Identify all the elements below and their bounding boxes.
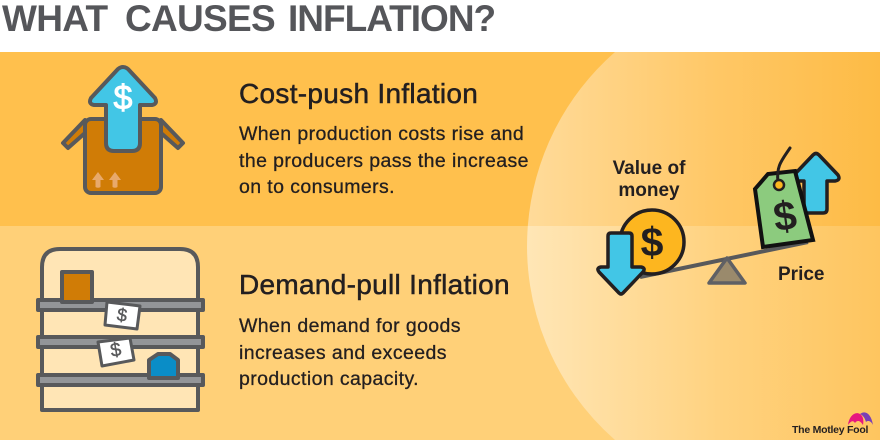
label: price: Price <box>778 264 824 285</box>
logo text: The Motley Fool <box>792 424 868 436</box>
icon: shelves with goods <box>38 249 203 410</box>
icon: Motley Fool jester hat <box>848 412 873 425</box>
dollar sign on box arrow: $ <box>114 79 132 117</box>
circle: upper background <box>528 52 880 226</box>
panel: demand-pull band <box>0 226 880 440</box>
text: cost-push description: When production costs rise and <box>239 123 524 145</box>
dollar sign on price tag: $ <box>771 192 799 240</box>
title <box>2 0 495 39</box>
icon: box with up arrow <box>63 67 183 193</box>
label: value of money <box>612 158 686 201</box>
panel: cost-push band <box>0 52 880 226</box>
label: value of money: money <box>618 180 680 201</box>
dollar sign on price note 1: $ <box>116 304 128 326</box>
icon: balance scale <box>598 148 839 294</box>
text: demand-pull description <box>238 315 461 390</box>
text: demand-pull description: production capacity. <box>239 368 419 390</box>
text: cost-push description: on to consumers. <box>239 176 395 198</box>
text: cost-push description <box>238 123 529 198</box>
label: value of money: Value of <box>613 158 685 179</box>
text: cost-push description: the producers pass the increase <box>239 150 529 172</box>
text: demand-pull description: When demand for goods <box>239 315 461 337</box>
dollar sign on coin: $ <box>641 219 663 265</box>
dollar sign on price note 2: $ <box>109 339 123 362</box>
heading: demand-pull inflation: Demand-pull Inflation <box>239 269 510 300</box>
circle: lower background <box>527 226 880 440</box>
heading: cost-push inflation: Cost-push Inflation <box>239 78 478 109</box>
text: demand-pull description: increases and exceeds <box>239 342 447 364</box>
